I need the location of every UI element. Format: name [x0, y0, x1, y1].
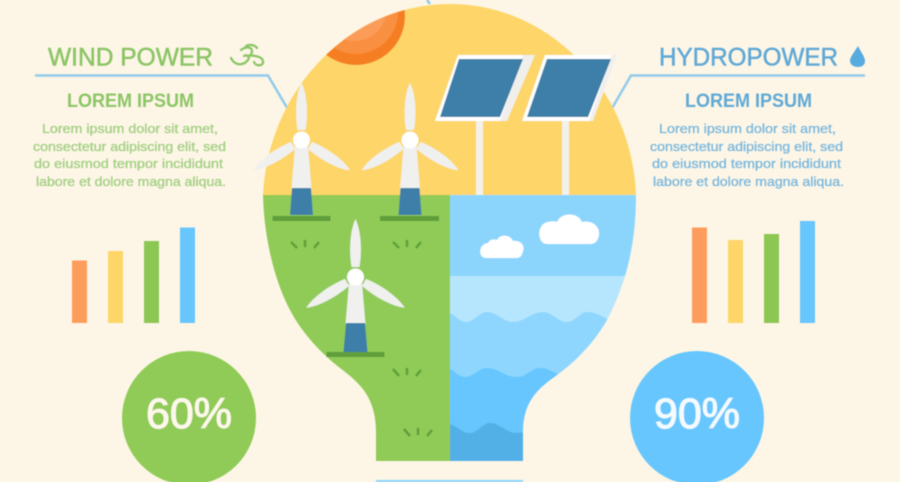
- light water band: [449, 276, 625, 322]
- wind percentage circle: [122, 351, 256, 482]
- wind turbine 2: [359, 83, 461, 221]
- sun: [307, 0, 405, 65]
- wind power heading: WIND POWER: [48, 44, 213, 72]
- hydropower body text: do eiusmod tempor incididunt: [652, 156, 841, 171]
- hydropower percentage circle: [630, 351, 764, 482]
- hydropower subheading: LOREM IPSUM: [685, 90, 812, 112]
- wind body text: consectetur adipiscing elit, sed: [33, 139, 226, 154]
- light bulb illustration: [255, 0, 650, 470]
- hydropower body text: consectetur adipiscing elit, sed: [650, 139, 843, 154]
- wave layer 1: [449, 312, 608, 378]
- wind power connector line: [36, 76, 289, 111]
- wave layer 2: [449, 368, 558, 434]
- cloud large: [539, 214, 599, 244]
- hydropower body text: labore et dolore magna aliqua.: [653, 174, 844, 189]
- grass field: [255, 195, 450, 465]
- hydropower body text: Lorem ipsum dolor sit amet,: [659, 121, 836, 136]
- icon: water drop: [850, 46, 865, 67]
- wind bar chart: [72, 228, 195, 323]
- wind percentage circle: 60%: [146, 390, 232, 438]
- hydropower body text: [650, 121, 844, 189]
- bulb base bar: [376, 480, 523, 482]
- wind body text: do eiusmod tempor incididunt: [34, 156, 223, 171]
- wind subheading: LOREM IPSUM: [67, 90, 194, 112]
- wind turbine 1: [250, 83, 353, 221]
- wind turbine 3: [303, 219, 408, 357]
- icon: wind: [231, 45, 263, 65]
- water sky: [450, 195, 645, 277]
- solar panel 2: [522, 55, 617, 195]
- sky: [255, 0, 645, 196]
- hydropower connector line: [611, 76, 864, 110]
- top connector line: [427, 0, 430, 4]
- solar panel 1: [435, 55, 535, 195]
- wind body text: Lorem ipsum dolor sit amet,: [42, 121, 218, 136]
- cloud small: [480, 236, 524, 258]
- wind body text: labore et dolore magna aliqua.: [36, 174, 226, 189]
- wind body text: [33, 121, 226, 189]
- wave layer 3: [450, 423, 523, 461]
- hydropower bar chart: [692, 221, 815, 323]
- grass tufts: [291, 240, 432, 436]
- hydropower heading: HYDROPOWER: [659, 44, 838, 72]
- hydropower percentage circle: 90%: [654, 390, 740, 438]
